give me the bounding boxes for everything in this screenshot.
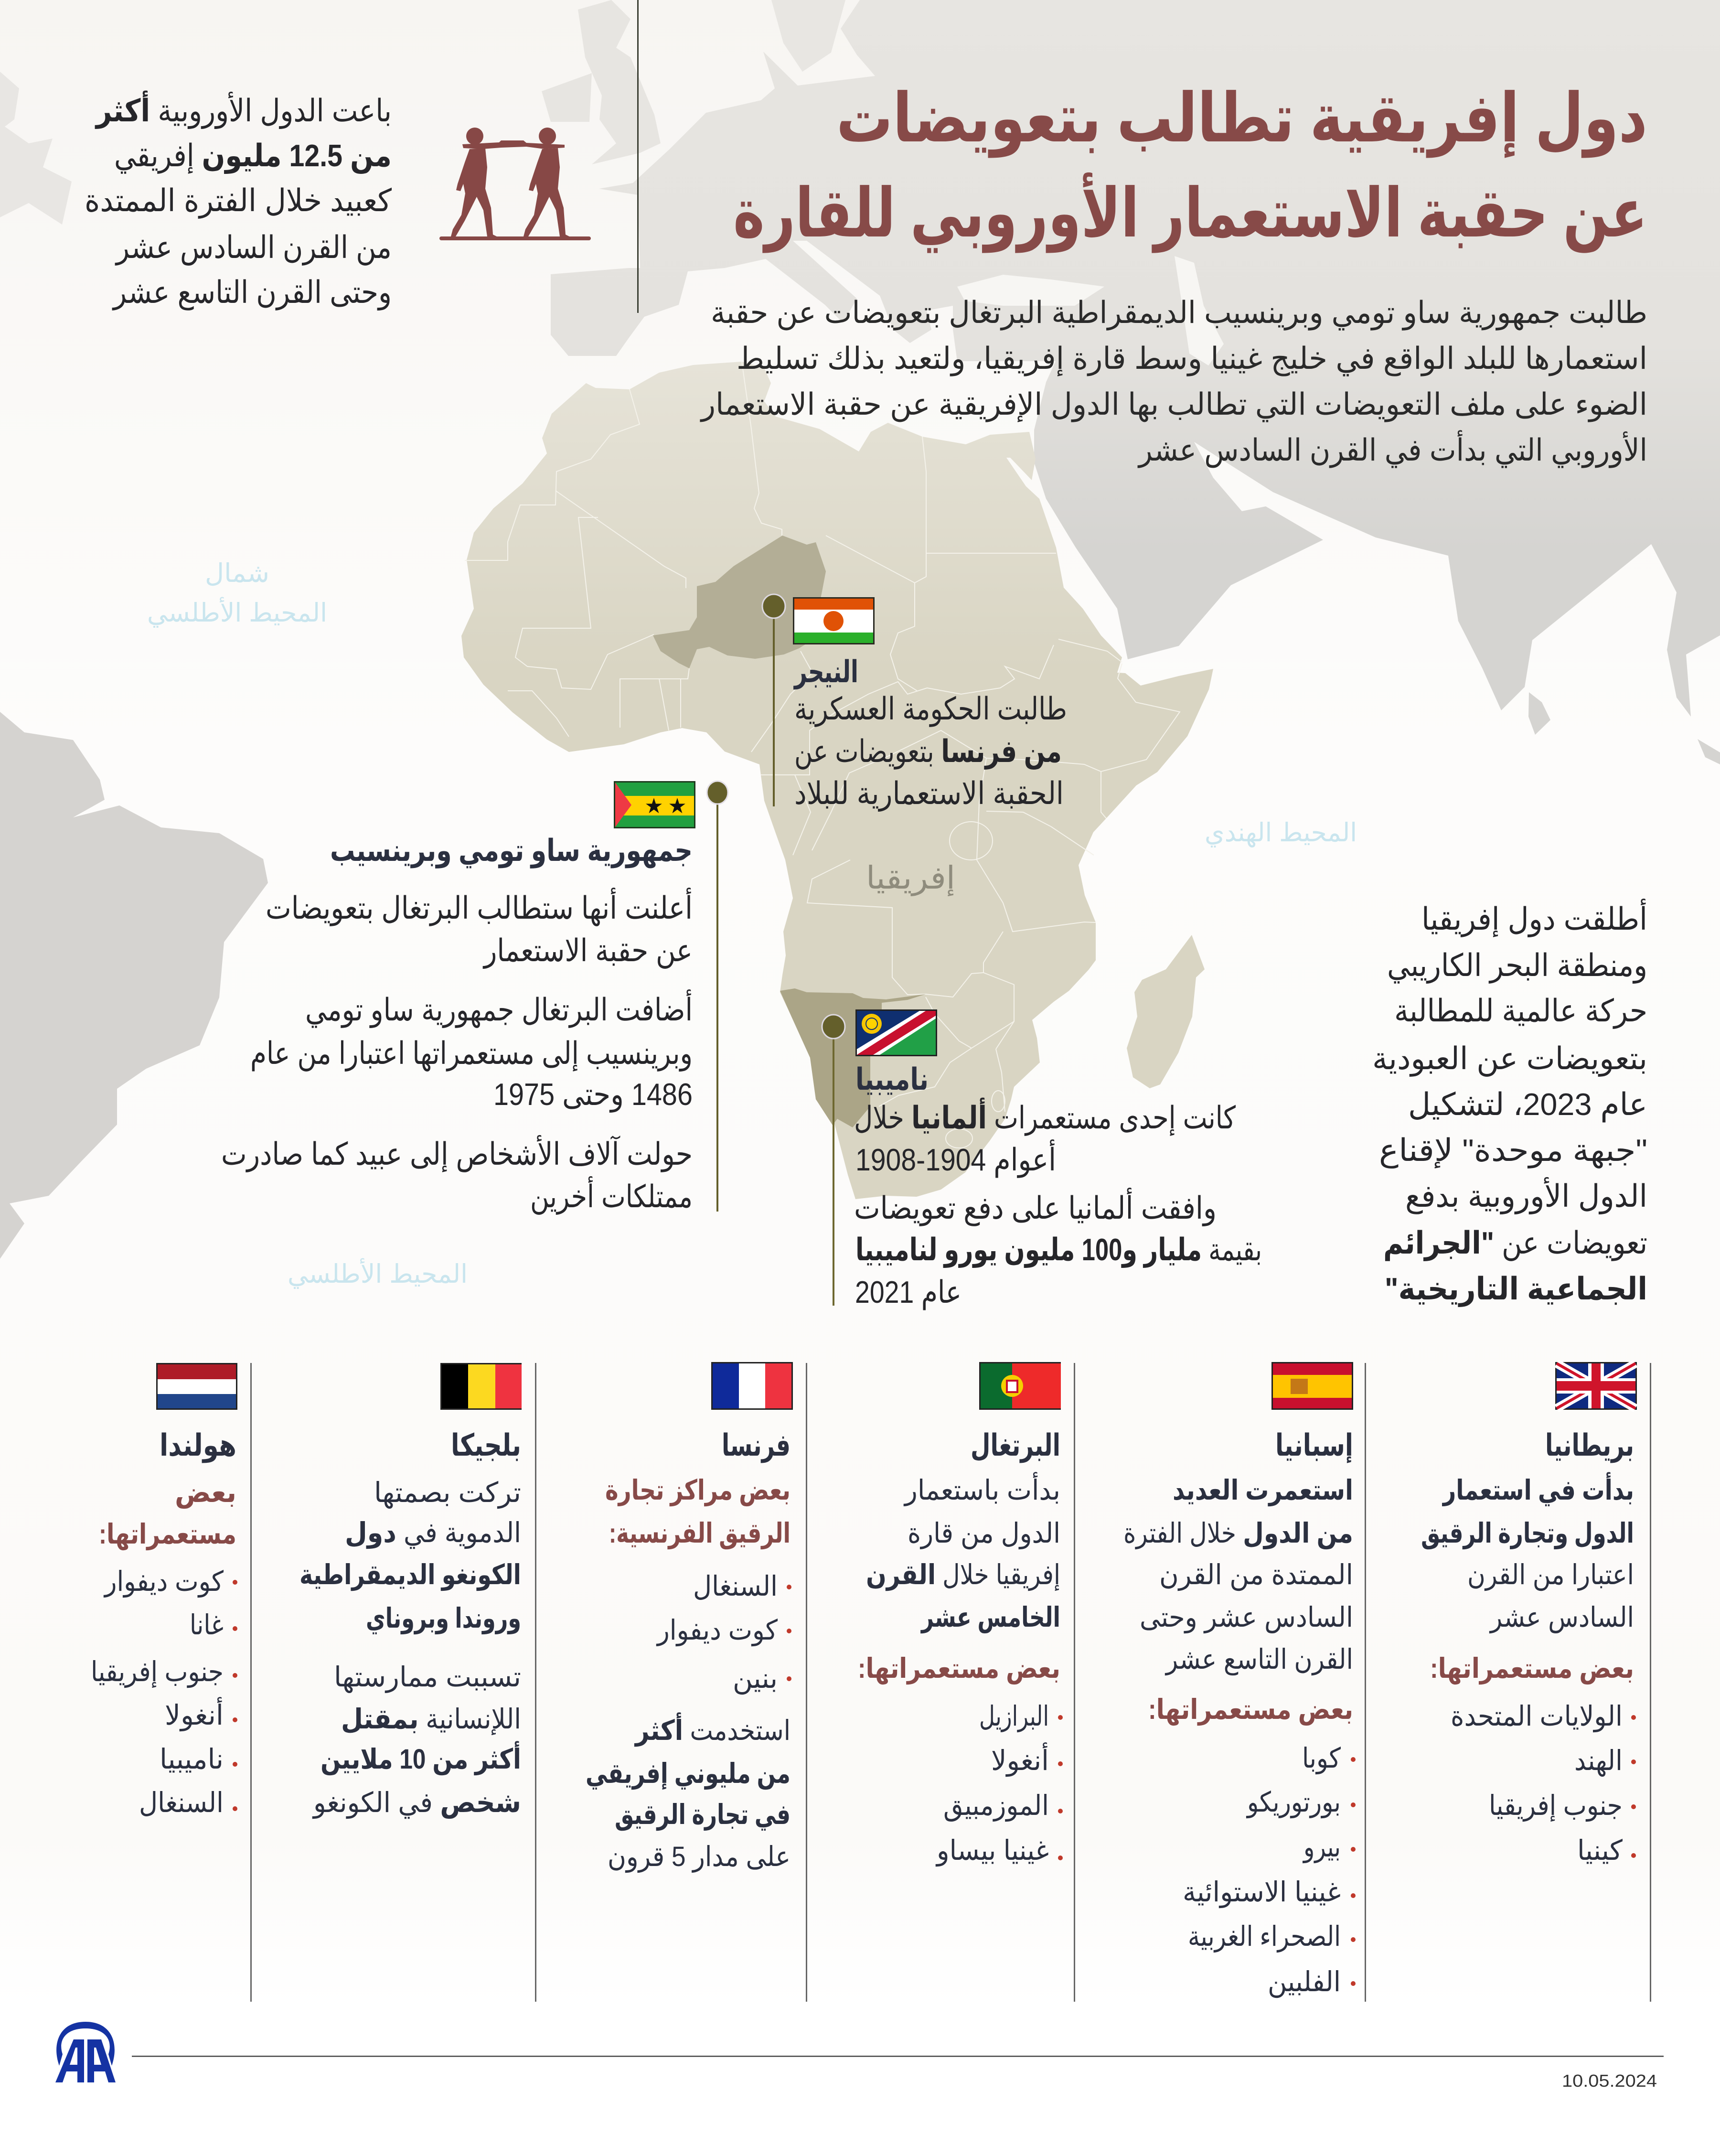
Sao Tome text: أعلنت أنها ستطالب البرتغال بتعويضات <box>266 888 693 926</box>
description: بدأت باستعمار <box>903 1472 1060 1506</box>
flag: Netherlands <box>156 1363 237 1410</box>
description: تركت بصمتها <box>374 1477 521 1509</box>
ocean labels <box>147 559 1357 1289</box>
column: Spain <box>1123 1362 1356 1998</box>
Sao Tome text: 1486 وحتى 1975 <box>493 1077 693 1113</box>
description: إفريقيا خلال القرن <box>866 1559 1060 1591</box>
Niger pointer <box>762 594 785 806</box>
description: الخامس عشر <box>920 1602 1060 1634</box>
colonies list <box>656 1571 791 1695</box>
Niger highlight <box>653 536 826 668</box>
colonies list: كوبا <box>1302 1743 1341 1775</box>
description: بدأت في استعمار <box>1442 1472 1634 1506</box>
heading: فرنسا <box>722 1428 791 1463</box>
text block: enslaved Africans fact <box>85 90 392 311</box>
Namibia text: كانت إحدى مستعمرات ألمانيا خلال <box>854 1097 1236 1136</box>
intro paragraph: الأوروبي التي بدأت في القرن السادس عشر <box>1137 430 1647 468</box>
text block: enslaved Africans fact: وحتى القرن التاسع عشر <box>112 275 392 311</box>
text block: global reparations movement: تعويضات عن "الجرائم <box>1383 1225 1647 1261</box>
description: أكثر من 10 ملايين <box>320 1741 521 1776</box>
colonies list: الولايات المتحدة <box>1451 1701 1623 1733</box>
subheading: الرقيق الفرنسية: <box>609 1518 791 1550</box>
Niger heading: النيجر <box>793 654 858 690</box>
Sao Tome text: أضافت البرتغال جمهورية ساو تومي <box>305 989 693 1028</box>
Niger text: طالبت الحكومة العسكرية <box>794 691 1067 727</box>
colonies list: البرازيل <box>979 1701 1049 1733</box>
intro paragraph <box>700 295 1647 468</box>
Namibia highlight <box>780 988 926 1127</box>
column: Netherlands <box>91 1363 237 1818</box>
Niger text: الحقبة الاستعمارية للبلاد <box>794 776 1064 812</box>
flag: Namibia <box>855 1009 937 1056</box>
heading: إسبانيا <box>1275 1428 1353 1463</box>
text block: enslaved Africans fact: من القرن السادس عشر <box>115 230 392 266</box>
column: France <box>586 1362 793 1873</box>
colonies list: السنغال <box>693 1571 778 1602</box>
colonies list <box>1451 1701 1636 1866</box>
description <box>299 1477 521 1819</box>
description <box>586 1712 791 1873</box>
heading: البرتغال <box>971 1428 1060 1463</box>
flag: Belgium <box>440 1363 522 1410</box>
description: شخص في الكونغو <box>312 1787 521 1819</box>
intro paragraph: الضوء على ملف التعويضات التي تطالب بها الدول الإفريقية عن حقبة الاستعمار <box>700 387 1647 422</box>
colonies list: الفلبين <box>1268 1966 1341 1998</box>
South America <box>0 712 268 1259</box>
callout: Niger <box>762 594 1067 812</box>
column: Belgium <box>299 1363 522 1819</box>
Sao Tome text: وبرينسيب إلى مستعمراتها اعتبارا من عام <box>250 1036 693 1072</box>
colonies list: الموزمبيق <box>943 1790 1049 1822</box>
ocean labels: المحيط الهندي <box>1205 818 1357 847</box>
Namibia text <box>854 1097 1262 1310</box>
map of Africa and surrounding continents <box>0 0 1720 1259</box>
flag: Portugal <box>979 1362 1061 1410</box>
flag: Sao Tome and Principe <box>614 781 695 828</box>
intro paragraph: استعمارها للبلد الواقع في خليج غينيا وسط قارة إفريقيا، ولتعيد بذلك تسليط <box>737 341 1647 376</box>
Sao Tome heading: جمهورية ساو تومي وبرينسيب <box>330 833 693 869</box>
subheading: بعض مستعمراتها: <box>858 1653 1060 1685</box>
Namibia heading: ناميبيا <box>855 1062 929 1096</box>
colonies list: بنين <box>733 1663 778 1695</box>
description: على مدار 5 قرون <box>608 1841 791 1873</box>
description: الممتدة من القرن <box>1159 1559 1353 1591</box>
description: الدول من قارة <box>908 1518 1060 1550</box>
top divider <box>637 0 639 313</box>
text block: global reparations movement: حركة عالمية للمطالبة <box>1394 993 1647 1029</box>
colonies list: الصحراء الغربية <box>1188 1921 1341 1953</box>
flag: Niger <box>793 597 875 644</box>
ocean labels: المحيط الأطلسي <box>288 1258 468 1289</box>
Sao Tome pointer <box>707 781 728 1212</box>
callout: Sao Tome and Principe <box>221 781 728 1215</box>
colonies list <box>1183 1743 1356 1998</box>
colonies list: بورتوريكو <box>1246 1787 1341 1819</box>
flag: Sao Tome and Principe: ★ <box>644 794 663 818</box>
description: القرن التاسع عشر <box>1164 1644 1353 1676</box>
heading: بريطانيا <box>1545 1428 1634 1463</box>
subheading: بعض مراكز تجارة <box>605 1475 791 1507</box>
column: Britain <box>1421 1362 1637 1866</box>
colonies list: أنغولا <box>165 1697 224 1732</box>
text block: global reparations movement: "جبهة موحدة" لإقناع <box>1379 1133 1647 1169</box>
text block: global reparations movement: أطلقت دول إفريقيا <box>1421 899 1647 937</box>
ocean labels: المحيط الأطلسي <box>147 597 327 628</box>
colonies list: كوت ديفوار <box>103 1566 224 1598</box>
Eurasia landmass <box>551 0 1720 717</box>
Britain and Ireland <box>578 0 661 164</box>
colonies list: غانا <box>190 1609 224 1641</box>
text block: global reparations movement: الجماعية التاريخية" <box>1385 1271 1647 1307</box>
Sao Tome text: حولت آلاف الأشخاص إلى عبيد كما صادرت <box>221 1135 693 1172</box>
subheading <box>605 1475 791 1550</box>
flag: UK <box>1555 1362 1637 1410</box>
ocean labels: شمال <box>205 559 269 588</box>
Malay peninsula <box>1698 739 1720 764</box>
column dividers <box>250 1363 1651 2002</box>
Madagascar <box>1127 935 1205 1088</box>
description: السادس عشر <box>1489 1602 1634 1634</box>
description <box>1123 1475 1353 1676</box>
footer rule <box>132 2056 1664 2057</box>
country borders <box>465 362 1180 1148</box>
description: من مليوني إفريقي <box>586 1758 791 1790</box>
logo: AA <box>55 2022 116 2082</box>
colonies list <box>935 1701 1063 1867</box>
Scandinavia <box>771 0 845 72</box>
description <box>866 1472 1060 1634</box>
flag: Sao Tome and Principe: ★ <box>668 794 687 818</box>
text block: global reparations movement: بتعويضات عن العبودية <box>1372 1041 1647 1077</box>
colonies list: ناميبيا <box>160 1744 224 1775</box>
subheading <box>99 1477 236 1551</box>
Namibia pointer <box>822 1015 845 1306</box>
colonies list: الهند <box>1574 1745 1623 1777</box>
Sri Lanka <box>1528 692 1550 735</box>
Namibia text: أعوام 1904-1908 <box>855 1139 1056 1178</box>
description: وروندا وبروناي <box>366 1603 521 1635</box>
Africa <box>461 362 1213 1199</box>
text block: enslaved Africans fact: باعت الدول الأوروبية أكثر <box>95 90 392 129</box>
colonies list: جنوب إفريقيا <box>91 1656 224 1688</box>
colonies list: كينيا <box>1577 1835 1623 1866</box>
Namibia text: وافقت ألمانيا على دفع تعويضات <box>854 1188 1217 1226</box>
intro paragraph: طالبت جمهورية ساو تومي وبرينسيب الديمقراطية البرتغال بتعويضات عن حقبة <box>711 295 1647 331</box>
subheading: بعض مستعمراتها: <box>1430 1653 1634 1685</box>
title <box>733 80 1647 253</box>
description: اللإنسانية بمقتل <box>341 1704 521 1736</box>
Niger text: من فرنسا بتعويضات عن <box>794 734 1062 770</box>
colonies list: كوت ديفوار <box>656 1615 778 1647</box>
callout: Namibia <box>822 1009 1262 1310</box>
description: استعمرت العديد <box>1173 1475 1353 1507</box>
subheading: مستعمراتها: <box>99 1519 236 1551</box>
Sao Tome text: عن حقبة الاستعمار <box>482 933 693 969</box>
text block: global reparations movement <box>1372 899 1647 1307</box>
description: اعتبارا من القرن <box>1467 1559 1634 1591</box>
text block: global reparations movement: الدول الأوروبية بدفع <box>1405 1177 1647 1214</box>
description: من الدول خلال الفترة <box>1123 1518 1353 1550</box>
description: الكونغو الديمقراطية <box>299 1559 521 1591</box>
colonies list: جنوب إفريقيا <box>1489 1790 1623 1822</box>
description <box>1421 1472 1634 1634</box>
Namibia text: بقيمة مليار و100 مليون يورو لناميبيا <box>855 1232 1262 1268</box>
colonies list: أنغولا <box>991 1742 1049 1777</box>
text block: global reparations movement: عام 2023، لتشكيل <box>1408 1087 1647 1123</box>
column: Portugal <box>858 1362 1063 1867</box>
flag: Spain <box>1271 1362 1353 1410</box>
colonies list: بيرو <box>1303 1832 1341 1864</box>
description: الدموية في دول <box>345 1517 521 1549</box>
description: في تجارة الرقيق <box>615 1799 791 1831</box>
text block: enslaved Africans fact: كعبيد خلال الفترة الممتدة <box>85 183 392 219</box>
Sao Tome text: ممتلكات أخرين <box>530 1176 693 1215</box>
description: الدول وتجارة الرقيق <box>1421 1518 1634 1550</box>
colonies list: غينيا الاستوائية <box>1183 1877 1341 1909</box>
Sao Tome text <box>221 888 693 1215</box>
description: السادس عشر وحتى <box>1140 1602 1353 1634</box>
Niger text <box>794 691 1067 812</box>
subheading: بعض <box>175 1477 236 1509</box>
Namibia text: عام 2021 <box>855 1275 961 1310</box>
icon: chained enslaved figures <box>439 128 591 240</box>
heading: بلجيكا <box>451 1428 521 1462</box>
colonies list: غينيا بيساو <box>935 1835 1049 1867</box>
heading: هولندا <box>160 1428 236 1463</box>
North America coast <box>0 72 72 225</box>
text block: enslaved Africans fact: من 12.5 مليون إفريقي <box>114 138 392 174</box>
description: استخدمت أكثر <box>634 1712 791 1747</box>
flag: France <box>711 1362 793 1410</box>
colonies list <box>91 1566 237 1818</box>
subheading: بعض مستعمراتها: <box>1148 1694 1353 1726</box>
colonies list: السنغال <box>139 1787 224 1818</box>
map label: Africa: إفريقيا <box>866 860 955 897</box>
description: تسببت ممارستها <box>334 1662 521 1693</box>
text block: global reparations movement: ومنطقة البحر الكاريبي <box>1387 948 1647 984</box>
date: 10.05.2024 <box>1562 2071 1657 2091</box>
